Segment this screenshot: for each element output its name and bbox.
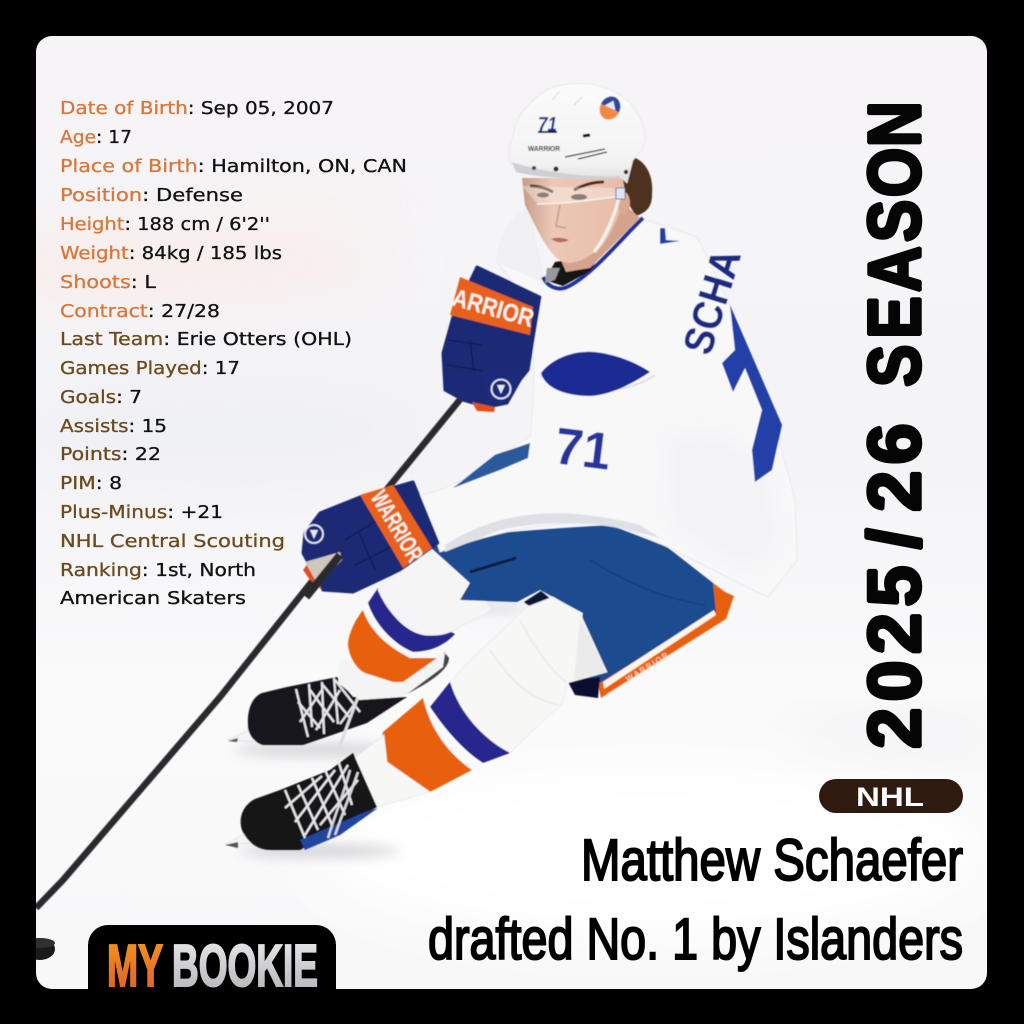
head and helmet [509,84,652,286]
player [36,84,797,908]
helmet [509,96,644,184]
player info list: Points : 22 [60,444,161,465]
far leg and skate [228,547,492,745]
player info list [60,98,407,609]
player info list: PIM: 8 [60,473,122,494]
player info list: Contract : 27/28 [60,301,220,322]
lower glove [303,482,438,597]
front leg and skate [225,597,607,850]
name on jersey: SCHA [674,244,750,360]
player info list: Place of Birth : Hamilton, ON, CAN [60,156,407,177]
player info list: Shoots : L [60,272,156,293]
season vertical heading: SEASON [854,101,936,387]
headline [428,828,963,972]
lower glove: WARRIOR [365,486,428,567]
player info list: Age: 17 [60,127,132,148]
shoulder logo [660,228,680,244]
player info list: Games Played : 17 [60,358,240,379]
logo badge: MyBookie: BOOKIE [172,933,318,999]
player info list: American Skaters [60,588,246,609]
pants [430,525,734,698]
NHL league pill [819,779,963,813]
pants: WARRIOR [624,651,670,684]
player info list: Height : 188 cm / 6'2'' [60,214,270,235]
player info list: Weight : 84kg / 185 lbs [60,243,282,264]
season vertical heading [853,101,936,749]
sleeve streak [453,443,530,488]
helmet brand text: WARRIOR [528,146,560,153]
season vertical heading: 2025/26 [853,423,936,749]
skate shadows [235,602,530,857]
player info list: Ranking : 1st, North [60,560,256,581]
player info list: NHL Central Scouting [60,531,285,552]
logo badge: MyBookie: MY [107,933,163,999]
player info list: Date of Birth : Sep 05, 2007 [60,98,334,119]
upper glove: ARRIOR [449,284,537,333]
player info list: Assists : 15 [60,416,167,437]
player info list: Last Team : Erie Otters (OHL) [60,329,352,350]
player info list: Goals : 7 [60,387,142,408]
Islanders helmet logo [599,96,621,120]
back number [722,305,782,482]
helmet number 71: 71 [538,114,557,136]
logo badge: MyBookie [88,925,336,989]
player info list: Plus-Minus : +21 [60,502,223,523]
jersey [420,208,797,597]
sleeve number 71: 71 [552,417,614,482]
ice hockey stick [36,375,480,908]
jersey shoulder patch [541,352,650,396]
player info list: Position : Defense [60,185,243,206]
jersey collar [543,218,643,289]
NHL league pill: NHL [856,782,924,812]
hockey puck [36,938,55,960]
upper glove [443,267,540,412]
